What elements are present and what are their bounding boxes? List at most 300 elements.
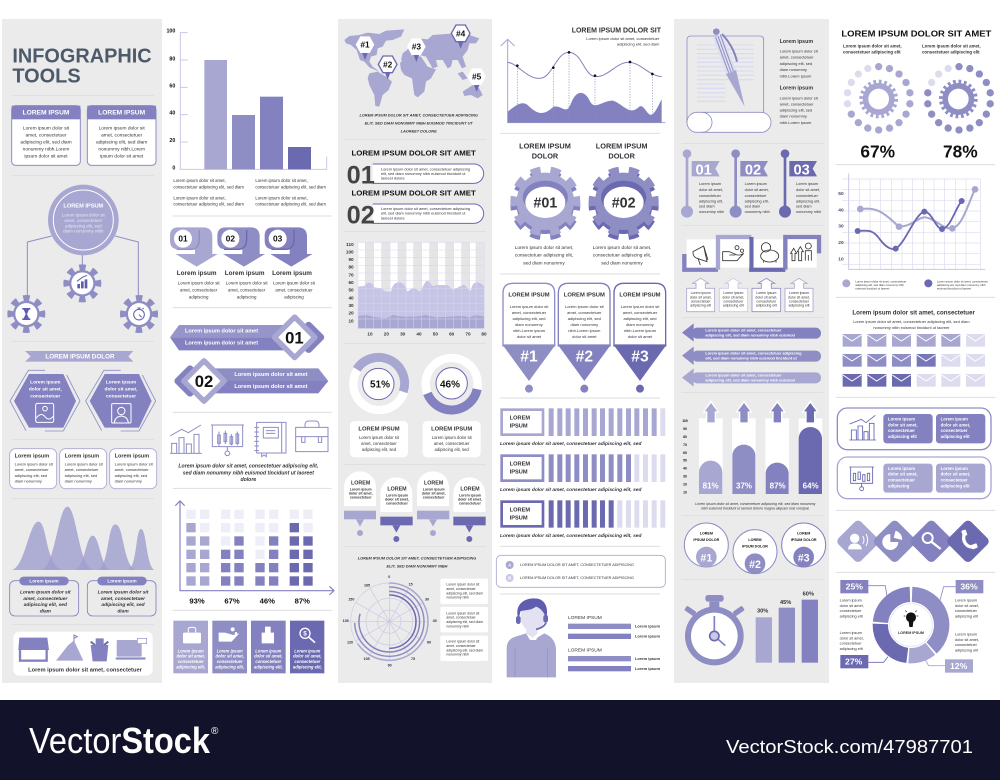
- donut caption right: Lorem ipsum dolor sit: [432, 435, 473, 440]
- stripe progress row 3: [500, 500, 665, 539]
- arrow bar chart axis: 50: [683, 459, 687, 463]
- stripe progress row 1: LOREM: [510, 416, 530, 422]
- area chart: [346, 242, 487, 337]
- mini card 3: Lorem ipsum: [756, 291, 776, 295]
- hexagon card: image: consectetuer: [30, 393, 60, 399]
- tab callout 2: LOREM: [387, 487, 407, 493]
- mini card 4: dolor sit amet,: [788, 295, 810, 299]
- radial chart: 0: [388, 575, 390, 579]
- tab callout 3: Lorem ipsum: [423, 488, 445, 492]
- tile: podium: consectetuer: [255, 659, 282, 664]
- donut label 27%: Lorem ipsum: [840, 631, 862, 635]
- panel: column 3 background: [338, 19, 492, 683]
- gear #02: sed diam nonummy: [601, 261, 643, 267]
- donut label 27%: 27%: [845, 656, 863, 666]
- stopwatch bar chart: 60%: [803, 591, 814, 597]
- pin card #2: LOREM IPSUM: [564, 293, 605, 299]
- segmented donut: [880, 594, 942, 656]
- flag step 02: 02: [745, 162, 761, 178]
- person labels and bars: Lorem ipsum: [635, 624, 660, 629]
- tab callout 1: consectetuer: [350, 496, 372, 500]
- stripe progress row 1: IPSUM: [510, 424, 528, 430]
- arrow 01: Lorem ipsum dolor sit: [178, 280, 220, 285]
- pin card #2: #2: [576, 349, 593, 366]
- pin card #3: diam nonummy: [626, 322, 655, 327]
- arrow banner 2: [682, 347, 821, 365]
- flag step 02: adipiscing elit,: [745, 199, 769, 203]
- numbered item 02: Lorem ipsum dolor sit amet, consectetuer adipiscing: [381, 207, 470, 211]
- text card 2: Lorem ipsum: [65, 454, 99, 460]
- arrow 02: Lorem ipsum dolor sit: [226, 280, 268, 285]
- arrow bar 64%: [799, 400, 822, 494]
- gear #02: #02: [612, 195, 636, 211]
- radial chart: 45: [433, 619, 437, 623]
- tile: hand with coins: [212, 621, 247, 673]
- framed chart card: dolor sit amet,: [941, 422, 970, 427]
- ribbon heading: [25, 351, 133, 362]
- arrow banner 1: adipiscing elit, sed diam nonummy nibh euismod: [705, 333, 796, 337]
- icon row caption: Lorem ipsum dolor sit amet, consectetuer adipiscing elit,: [178, 463, 318, 469]
- mini card 4: consectetuer: [789, 299, 810, 303]
- tile: briefcase: [173, 621, 208, 673]
- pin card #1: nibh.Lorem ipsum: [513, 328, 546, 333]
- line chart with grid: 40: [838, 207, 844, 213]
- radial chart: 60: [427, 641, 431, 645]
- gear #01: LOREM IPSUM: [519, 141, 571, 150]
- framed chart card: [837, 408, 991, 450]
- card: lorem ipsum left: amet, consectetuer: [25, 132, 67, 138]
- text card 2: [60, 449, 107, 489]
- numbered item 01: Lorem ipsum dolor sit amet, consectetuer adipiscing: [381, 167, 470, 171]
- callout card left: adipiscing elit, sed: [24, 602, 68, 608]
- stripe progress row 1: Lorem ipsum dolor sit amet, consectetuer adipiscing elit, sed: [500, 441, 643, 447]
- mini card 1: Lorem ipsum: [691, 291, 711, 295]
- flag step 01: sed diam: [699, 204, 715, 208]
- area chart: 90: [348, 257, 354, 262]
- world map with pins: #4: [456, 28, 466, 38]
- radar caption: ELIT, SED DIAM NONUMMY NIBH: [387, 565, 448, 569]
- card: lorem ipsum right: [87, 106, 156, 165]
- bar chart captions: Lorem ipsum dolor sit amet,: [173, 196, 226, 201]
- pin card #3: adipiscing elit, sed: [623, 316, 657, 321]
- columns 1 and 2, upper half: [8, 29, 332, 361]
- donut label 27%: adipiscing elit: [840, 647, 864, 651]
- chart legend: adipiscing elit, sed diam nonummy nibh: [937, 283, 986, 287]
- numbered item 01: elit, sed diam nonummy nibh euismod tincidunt ut: [381, 172, 466, 176]
- arrow banner 2: elit, sed diam nonummy nibh euismod tincidunt ut: [705, 356, 798, 360]
- arrow 02: 02: [226, 234, 235, 244]
- radial note 3: [440, 636, 488, 661]
- columns 5 and 6, lower half: [681, 334, 995, 673]
- radial note 2: Lorem ipsum dolor sit: [446, 611, 479, 615]
- pin card #3: amet, consectetuer: [623, 310, 658, 315]
- chart legend: euismod tincidunt ut laoreet: [937, 287, 971, 291]
- area chart: 30: [400, 332, 406, 337]
- donut caption left: LOREM IPSUM: [358, 426, 400, 432]
- scroll text: nibh.Lorem ipsum: [780, 73, 812, 78]
- stripe progress row 2: [500, 454, 665, 493]
- square grid chart: 67%: [224, 597, 240, 606]
- tab callout 1: Lorem ipsum: [350, 488, 372, 492]
- tab callout 3: consectetuer: [423, 496, 445, 500]
- pin card #2: Lorem ipsum dolor sit: [565, 304, 605, 309]
- donut label 27%: dolor sit amet,: [840, 636, 864, 640]
- pin card #3: nibh.Lorem ipsum: [624, 328, 657, 333]
- callout card left: Lorem ipsum dolor sit: [20, 590, 71, 596]
- arrow 03: Lorem ipsum: [272, 270, 312, 277]
- framed chart card: adipiscing elit: [888, 434, 917, 439]
- icon: stopwatch: [684, 595, 745, 665]
- square grid chart: 93%: [189, 597, 205, 606]
- stopwatch bar chart: 45%: [780, 600, 791, 606]
- tile: hand with coins: Lorem ipsum: [217, 648, 243, 653]
- stripe progress row 2: LOREM: [510, 462, 530, 468]
- donut label 12%: [925, 633, 979, 673]
- donut label 36%: consectetuer: [955, 609, 978, 613]
- scroll text: adipiscing elit, sed: [780, 61, 812, 66]
- badge #2: [733, 530, 777, 574]
- diamond icon: phone: [945, 519, 991, 564]
- callout card right: diam: [117, 608, 129, 614]
- bar chart captions: consectetuer adipiscing elit, sed diam: [173, 202, 244, 207]
- flag step 03: Lorem ipsum: [796, 182, 818, 186]
- flag step 02: sed diam: [745, 204, 760, 208]
- area chart: 10: [367, 332, 373, 337]
- arrow bar chart axis: 90: [683, 427, 687, 431]
- scroll text: amet, consectetuer: [780, 55, 814, 60]
- icon row caption: sed diam nonummy nibh euismod tincidunt ut laoreet: [183, 470, 314, 476]
- numbered item 01: LOREM IPSUM DOLOR SIT AMET: [351, 150, 477, 157]
- radial note 1: [440, 579, 488, 604]
- badge #2: LOREM: [748, 538, 762, 542]
- hexagon card: image: Lorem ipsum: [30, 380, 60, 386]
- tab callout 1: dolor sit amet,: [349, 492, 373, 496]
- tile: hand with coins: consectetuer: [217, 659, 243, 664]
- bar chart captions: consectetuer adipiscing elit, sed diam: [255, 202, 326, 207]
- tile: podium: Lorem ipsum: [255, 648, 282, 653]
- tab callout 3: dolor sit amet,: [422, 492, 446, 496]
- framed board card: dolor sit amet,: [888, 472, 918, 477]
- stepped icon frame: [684, 237, 819, 270]
- hexagon card: profile: dolor sit amet,: [104, 387, 138, 393]
- bar chart: 100: [166, 29, 175, 35]
- legend box: [496, 555, 665, 587]
- mini card 1: consectetuer: [691, 299, 711, 303]
- donut caption left: Lorem ipsum dolor sit: [359, 435, 400, 440]
- icon: notebook: [254, 422, 286, 457]
- pin card #1: diam nonummy: [515, 322, 544, 327]
- radial note 2: adipiscing elit, sed diam: [446, 620, 483, 624]
- radial chart: 30: [425, 598, 429, 602]
- callout card right: [87, 577, 156, 616]
- scroll text: Lorem ipsum: [780, 86, 813, 92]
- radial chart: 135: [343, 619, 349, 623]
- circle: lorem ipsum hub: Lorem ipsum dolor sit: [62, 213, 106, 218]
- circle: lorem ipsum hub: amet, consectetuer: [64, 218, 103, 223]
- card: lorem ipsum left: Lorem ipsum dolor sit: [23, 125, 70, 131]
- subheadings: Lorem ipsum dolor sit amet,: [922, 44, 981, 49]
- donut caption right: amet, consectetuer: [434, 441, 470, 446]
- arrow 03: Lorem ipsum dolor sit: [273, 280, 316, 285]
- numbered item 01: laoreet dolore: [381, 177, 405, 181]
- bar chart: 80: [169, 56, 175, 62]
- flag step 01: nonummy nibh: [699, 210, 724, 214]
- radial chart: 105: [364, 657, 370, 661]
- tile: hand with coins: adipiscing elit,: [215, 664, 244, 669]
- mini card 4: [785, 278, 813, 312]
- radial note 2: nonummy nibh: [446, 624, 469, 628]
- donut label 25%: 25%: [846, 582, 863, 592]
- gear #01: Lorem ipsum dolor sit amet,: [515, 245, 573, 251]
- tile: briefcase: dolor sit amet,: [176, 654, 205, 659]
- tile: briefcase: consectetuer: [178, 659, 204, 664]
- radial note 2: amet, consectetuer: [446, 616, 477, 620]
- arrow 01: Lorem ipsum: [177, 270, 217, 277]
- flag step 02: [730, 149, 770, 218]
- area chart: 20: [348, 311, 354, 316]
- donut label 27%: consectetuer: [840, 641, 862, 645]
- donut caption right: [423, 421, 481, 457]
- columns 3 and 4, lower half: [343, 357, 665, 677]
- pin card #2: diam nonummy: [570, 322, 599, 327]
- envelope heading: Lorem ipsum dolor sit amet, consectetuer: [852, 310, 975, 317]
- tab callout 4: Lorem ipsum: [459, 494, 481, 498]
- pin card #1: [503, 283, 555, 393]
- numbered item 02: LOREM IPSUM DOLOR SIT AMET: [351, 190, 477, 197]
- area chart: 70: [465, 332, 471, 337]
- heading: lorem ipsum dolor sit amet: LOREM IPSUM DOLOR SIT AMET: [841, 29, 992, 39]
- text card 3: diam nonummy: [115, 479, 142, 484]
- flag step 03: adipiscing elit,: [796, 199, 820, 203]
- arrow bar 81%: [699, 400, 723, 494]
- area chart: 40: [416, 332, 422, 337]
- gear #01: sed diam nonummy: [523, 261, 565, 267]
- arrow banner 3: adipiscing elit, sed diam nonummy nibh euismod: [705, 378, 796, 382]
- arrow 01: [170, 227, 220, 300]
- title: INFOGRAPHIC: [12, 46, 152, 68]
- framed chart card: adipiscing elit: [941, 434, 970, 439]
- hexagon card: profile: consectetuer: [106, 393, 136, 399]
- arrow bar caption: Lorem ipsum dolor sit amet, consectetuer adipiscing elit, sed diam nonummy: [695, 502, 816, 506]
- badge #1: [684, 523, 728, 567]
- banner 01: [170, 313, 326, 361]
- connector lines: [27, 236, 138, 297]
- bar chart: [166, 29, 327, 171]
- gear #01: consectetuer adipiscing elit,: [515, 253, 573, 259]
- circle: lorem ipsum hub: LOREM IPSUM: [63, 204, 104, 210]
- radial chart: 75: [411, 657, 415, 661]
- arrow bar chart axis: 20: [683, 482, 687, 486]
- card: lorem ipsum right: adipiscing elit, sed diam: [96, 139, 147, 145]
- bar chart: 60: [169, 83, 175, 89]
- arrow 03: [265, 227, 316, 300]
- radial note 3: adipiscing elit, sed diam: [446, 648, 483, 652]
- scroll text: amet, consectetuer: [780, 101, 814, 106]
- radial note 3: nonummy nibh: [446, 653, 469, 657]
- numbered item 02: 02: [347, 201, 375, 229]
- badge #1: LOREM: [700, 531, 713, 535]
- badge #3: LOREM: [797, 531, 810, 535]
- pin card #1: Lorem ipsum dolor sit: [510, 304, 549, 309]
- tile: magnifier: $: [303, 631, 307, 638]
- arrow bar 37%: 37%: [736, 482, 752, 491]
- gear #02: DOLOR: [608, 151, 636, 160]
- stopwatch bar chart: [756, 591, 818, 663]
- person labels and bars: [568, 615, 660, 671]
- square grid chart: 87%: [295, 597, 310, 606]
- pin card #3: LOREM IPSUM: [619, 293, 661, 299]
- text card 3: Lorem ipsum dolor sit: [115, 461, 154, 466]
- diamond icon: speaker: [835, 519, 881, 564]
- gear #01: DOLOR: [532, 151, 559, 160]
- text card 3: [110, 449, 157, 489]
- framed board card: [837, 457, 991, 499]
- numbered item 01: [347, 150, 484, 189]
- ribbon heading: LOREM IPSUM DOLOR: [45, 354, 115, 361]
- radar caption: LOREM IPSUM DOLOR SIT AMET, CONSECTETUER ADIPISCING: [358, 557, 476, 561]
- card: lorem ipsum left: ipsum dolor sit amet: [24, 153, 68, 159]
- person labels and bars: Lorem ipsum: [635, 666, 660, 671]
- framed board card: consectetuer: [888, 477, 915, 482]
- flag step 03: nonummy nibh: [796, 210, 821, 214]
- tab callout 1: [344, 471, 376, 536]
- flag step 02: consectetuer: [745, 194, 767, 198]
- flag step 02: nonummy nibh: [745, 210, 770, 214]
- footer bar: [0, 700, 1000, 780]
- area chart: 30: [348, 303, 354, 308]
- chart legend: [842, 279, 988, 291]
- radial chart: 15: [409, 582, 413, 586]
- mini card 2: dolor sit amet,: [722, 295, 744, 299]
- footer bar: ®: [211, 726, 219, 737]
- framed board card: Lorem ipsum: [888, 466, 915, 471]
- donut caption left: [350, 421, 408, 457]
- area chart: 80: [481, 332, 487, 337]
- scroll text: Lorem ipsum: [780, 39, 813, 45]
- pin card #1: dolor sit amet: [517, 334, 542, 339]
- arrow bar chart axis: 70: [683, 443, 687, 447]
- text card 2: adipiscing elit, sed: [65, 473, 97, 478]
- circle: lorem ipsum hub: diam nonummy nibh: [63, 229, 104, 234]
- banner 02: Lorem ipsum dolor sit amet: [234, 372, 308, 378]
- text card 1: diam nonummy: [15, 479, 42, 484]
- arrow bar 64%: 64%: [803, 482, 819, 491]
- envelope heading: [852, 310, 975, 330]
- legend box: LOREM IPSUM DOLOR SIT AMET, CONSECTETUER ADIPISCING: [520, 576, 634, 580]
- banner 02: 02: [195, 372, 213, 391]
- arrow 02: [217, 227, 268, 300]
- stripe progress row 3: Lorem ipsum dolor sit amet, consectetuer adipiscing elit, sed: [500, 533, 643, 539]
- arrow 02: amet, consectetuer: [228, 288, 266, 293]
- title: TOOLS: [12, 66, 81, 88]
- stripe progress row 2: Lorem ipsum dolor sit amet, consectetuer adipiscing elit, sed: [500, 487, 643, 493]
- hexagon card: image: [10, 370, 80, 431]
- gear #01: [511, 141, 580, 267]
- tile: podium: adipiscing elit,: [254, 664, 283, 669]
- mountain area chart: [12, 507, 154, 570]
- stripe progress row 1: [500, 408, 665, 447]
- hexagon card: profile: [86, 370, 156, 431]
- mini card 1: [687, 278, 715, 312]
- text card 2: amet, consectetuer: [65, 467, 99, 472]
- panel: white icon strip: [13, 632, 153, 676]
- pin card #1: #1: [520, 349, 538, 366]
- tab callout 4: dolor sit amet,: [458, 498, 482, 502]
- icon row caption: dolore: [240, 477, 256, 483]
- arrow banner 1: Lorem ipsum dolor sit amet, consectetuer: [705, 328, 782, 332]
- line and area chart: [501, 39, 665, 123]
- card: lorem ipsum right: Lorem ipsum dolor sit: [99, 125, 145, 131]
- square grid chart: 46%: [260, 597, 275, 606]
- gear progress 78%: 78%: [943, 142, 978, 162]
- map caption: ELIT, SED DIAM NONUMMY NIBH EUISMOD TINCIDUNT UT: [365, 121, 473, 125]
- text card 1: Lorem ipsum: [15, 454, 49, 460]
- arrow bar 37%: [732, 400, 756, 494]
- world map with pins: #1: [360, 40, 370, 50]
- flag step 01: 01: [696, 162, 712, 178]
- donut label 25%: Lorem ipsum: [840, 599, 862, 603]
- gear #02: [589, 141, 658, 267]
- tile: briefcase: Lorem ipsum: [178, 648, 204, 653]
- pin card #3: [614, 283, 666, 393]
- tile: briefcase: adipiscing elit,: [176, 664, 205, 669]
- banner 01: 01: [285, 328, 304, 347]
- pin card #2: adipiscing elit, sed: [568, 316, 601, 321]
- donut caption left: adipiscing elit, sed: [362, 447, 397, 452]
- card: lorem ipsum right: LOREM IPSUM: [98, 110, 146, 117]
- badge #2: IPSUM DOLOR: [742, 545, 768, 549]
- gear #02: consectetuer adipiscing elit,: [593, 253, 651, 259]
- mini card 4: Lorem ipsum: [789, 291, 809, 295]
- person with headset: [507, 598, 556, 677]
- area chart: 40: [348, 295, 354, 300]
- mini card 3: dolor sit amet,: [755, 295, 777, 299]
- numbered item 02: elit, sed diam nonummy nibh euismod tincidunt ut: [381, 212, 466, 216]
- mini card 2: Lorem ipsum: [723, 291, 743, 295]
- badge #1: IPSUM DOLOR: [693, 538, 720, 542]
- gear progress 67%: [844, 63, 914, 162]
- area chart: 60: [348, 280, 354, 285]
- chart legend: Lorem ipsum dolor sit amet, consectetuer: [937, 280, 988, 284]
- donut label 36%: adipiscing elit: [955, 614, 979, 618]
- donut label 25%: adipiscing elit: [840, 614, 864, 618]
- footer bar: VectorStock.com/47987701: [726, 736, 973, 757]
- stripe progress row 3: LOREM: [510, 508, 530, 514]
- radial note 1: amet, consectetuer: [446, 587, 477, 591]
- gear #02: Lorem ipsum dolor sit amet,: [593, 245, 651, 251]
- text card 2: Lorem ipsum dolor sit: [65, 461, 104, 466]
- tab callout 3: [417, 471, 449, 536]
- donut caption right: adipiscing elit, sed: [435, 447, 469, 452]
- icon: briefcase: [296, 421, 328, 452]
- radial note 1: adipiscing elit, sed diam: [446, 591, 483, 595]
- flag step 03: [779, 149, 821, 218]
- arrow bar chart axis: 60: [683, 451, 687, 455]
- subheadings: Lorem ipsum dolor sit amet,: [843, 44, 902, 49]
- banner 02: [173, 357, 328, 405]
- card: lorem ipsum left: adipiscing elit, sed diam: [20, 139, 72, 145]
- tile: hand with coins: dolor sit amet,: [215, 654, 244, 659]
- arrow bar chart axis: 30: [683, 475, 687, 479]
- framed board card: adipiscing: [888, 483, 910, 488]
- circle: lorem ipsum hub: [48, 185, 119, 255]
- badge #3: [782, 523, 826, 567]
- line chart with grid: [838, 173, 985, 269]
- mini card 3: consectetuer: [756, 299, 777, 303]
- area chart: 10: [348, 318, 354, 323]
- scroll text: Lorem ipsum dolor sit: [780, 95, 819, 100]
- text card 1: [10, 449, 57, 489]
